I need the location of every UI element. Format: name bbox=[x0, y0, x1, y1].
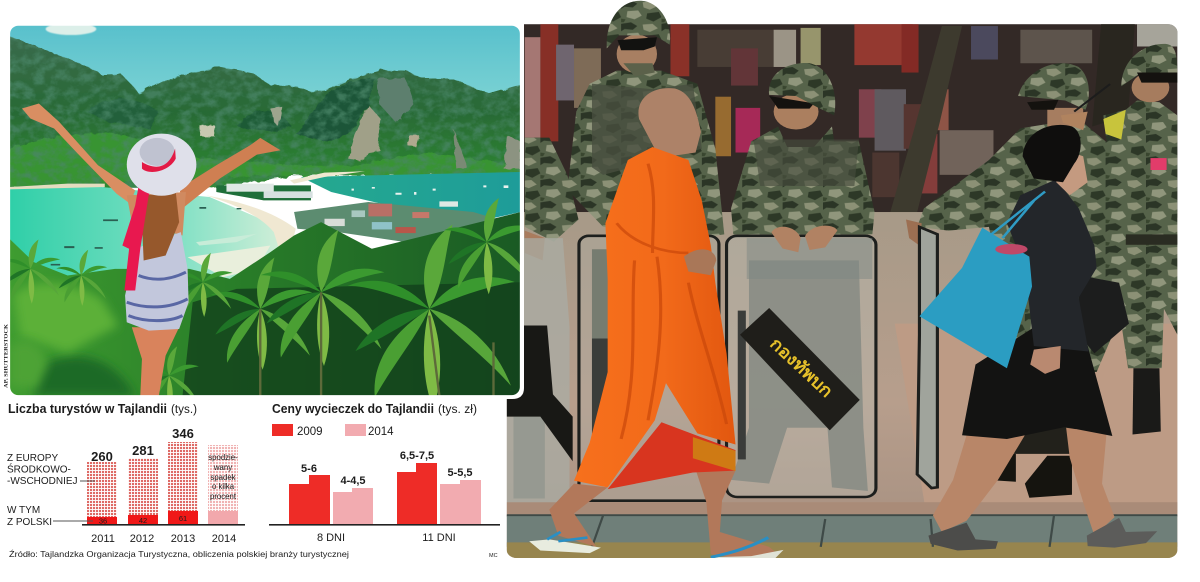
jungle foreground bbox=[9, 212, 521, 396]
source line: Źródło: Tajlandzka Organizacja Turystyczna, obliczenia polskiej branży turystycznej bbox=[9, 549, 349, 559]
woman bbox=[919, 125, 1157, 551]
back bbox=[127, 192, 186, 235]
label: from Central-Eastern Europe: -WSCHODNIEJ bbox=[7, 476, 78, 487]
bar 2012 bbox=[128, 443, 158, 545]
woman face bbox=[1056, 154, 1088, 196]
chart title: Ceny wycieczek do Tajlandii bbox=[272, 401, 434, 416]
legs bbox=[132, 327, 179, 396]
pavement bbox=[507, 212, 1177, 558]
11-day group bbox=[397, 450, 481, 544]
boats and village bbox=[51, 184, 508, 266]
scene clipped to the rounded frame bbox=[2, 23, 531, 410]
raised right arm bbox=[179, 138, 281, 207]
soldier at far right bbox=[1103, 44, 1177, 434]
soldier far left bbox=[513, 138, 579, 498]
label: including from Poland: W TYM bbox=[7, 505, 40, 516]
dark trunks and shade bbox=[10, 282, 521, 396]
bar 2012: 2012 bbox=[130, 533, 154, 545]
soldier using a radio bbox=[906, 63, 1126, 372]
left bay bbox=[9, 187, 287, 279]
sandy beaches bbox=[9, 171, 365, 277]
monk undergarment bbox=[608, 422, 736, 489]
bar 2013 bbox=[168, 426, 198, 545]
pink scarf bbox=[122, 162, 172, 291]
monk legs bbox=[550, 470, 774, 557]
right bay bbox=[301, 172, 521, 219]
yellow lettering on the shield plate: กองทัพบก bbox=[766, 334, 836, 401]
woman jacket bbox=[1007, 179, 1097, 352]
riot shield: centre bbox=[727, 236, 876, 497]
chart unit: (tys.) bbox=[171, 404, 197, 416]
woman hair bbox=[1023, 125, 1081, 182]
monk bbox=[529, 88, 784, 562]
boots of the soldier behind the woman bbox=[998, 427, 1076, 498]
8-day group: 8 DNI bbox=[317, 532, 345, 544]
label: from Central-Eastern Europe: ŚRODKOWO- bbox=[7, 462, 71, 476]
woman left sandal bbox=[928, 523, 998, 551]
mountain foliage texture bbox=[7, 32, 524, 189]
chart: trip prices to Thailand bbox=[269, 401, 500, 544]
axis bbox=[269, 524, 500, 526]
sky bbox=[10, 26, 520, 94]
market stalls background bbox=[507, 24, 1177, 218]
rear flip-flop bbox=[529, 539, 601, 553]
woman legs bbox=[933, 428, 1115, 536]
bar 2011: 36 bbox=[99, 516, 107, 526]
axis bbox=[82, 524, 245, 526]
photo credit: AP, SHUTTERSTOCK bbox=[4, 323, 10, 388]
woman hand bbox=[1030, 346, 1061, 374]
blue shopping bag bbox=[919, 228, 1032, 368]
bar 2014 with forecast note: wany bbox=[213, 463, 232, 472]
riot shield: edge-on at right bbox=[917, 227, 937, 488]
black shield plate bbox=[740, 308, 860, 430]
label: including from Poland bbox=[7, 505, 93, 528]
sun hat bbox=[127, 134, 196, 196]
11-day group: 5-5,5 bbox=[447, 467, 473, 479]
author initials: MC bbox=[489, 553, 498, 559]
photo: soldiers, monk and woman in Bangkok bbox=[507, 1, 1177, 562]
bar 2013: 346 bbox=[172, 426, 194, 441]
palm trees bbox=[2, 198, 531, 410]
label: from Central-Eastern Europe bbox=[7, 453, 95, 487]
patterned dress bbox=[125, 232, 189, 331]
label: including from Poland: Z POLSKI bbox=[7, 517, 52, 528]
front flip-flop bbox=[714, 550, 784, 558]
rounded frame outline bbox=[9, 25, 521, 396]
legend: 2014 bbox=[368, 426, 394, 438]
limestone cliffs bbox=[199, 78, 521, 169]
mountains bbox=[7, 35, 524, 189]
bar 2011: 2011 bbox=[91, 533, 115, 545]
woman skirt bbox=[962, 327, 1112, 439]
bar 2012: 42 bbox=[139, 516, 147, 525]
scene clipped to the photo frame bbox=[507, 24, 1177, 562]
orange robe bbox=[574, 147, 736, 487]
soldier helmet rising above the photo frame bbox=[607, 1, 670, 76]
bar 2014 with forecast note: 2014 bbox=[212, 533, 236, 545]
legend: 2009 bbox=[297, 426, 323, 438]
cloud bbox=[46, 23, 96, 35]
chart unit: (tys. zł) bbox=[438, 404, 477, 416]
bar 2014 with forecast note: o kilka bbox=[212, 482, 235, 491]
riot shield: left, behind the monk bbox=[579, 236, 719, 501]
woman right sandal bbox=[1087, 518, 1157, 548]
bar 2014 with forecast note: procent bbox=[210, 492, 237, 501]
bar 2014 with forecast note bbox=[208, 445, 238, 545]
bar 2011 bbox=[87, 449, 117, 545]
bar 2013: 61 bbox=[179, 514, 187, 523]
soldier behind the monk bbox=[567, 71, 724, 405]
monk hand bbox=[684, 249, 716, 275]
bar 2012: 281 bbox=[132, 443, 154, 458]
8-day group: 5-6 bbox=[301, 463, 317, 475]
long hair bbox=[142, 192, 179, 260]
legend bbox=[272, 424, 394, 438]
bar 2014 with forecast note: spadek bbox=[210, 473, 236, 482]
white frame around the beach photo bbox=[0, 20, 524, 399]
soldier at centre bbox=[731, 63, 875, 234]
bar 2014 with forecast note: spodzie- bbox=[208, 453, 238, 462]
photo: woman over a tropical bay bbox=[2, 23, 531, 410]
woman with raised arms bbox=[22, 104, 281, 396]
riot shield: far left bbox=[507, 238, 573, 502]
raised left arm bbox=[22, 104, 135, 204]
chart title: Liczba turystów w Tajlandii bbox=[8, 401, 167, 416]
hands on the shield bbox=[771, 226, 837, 252]
11-day group: 6,5-7,5 bbox=[400, 450, 434, 462]
chart: tourists in Thailand bbox=[7, 401, 245, 545]
11-day group: 11 DNI bbox=[422, 532, 456, 544]
8-day group bbox=[289, 463, 373, 544]
bar 2013: 2013 bbox=[171, 533, 195, 545]
8-day group: 4-4,5 bbox=[340, 475, 366, 487]
label: from Central-Eastern Europe: Z EUROPY bbox=[7, 453, 58, 464]
monk head bbox=[638, 88, 701, 156]
woman backpack bbox=[1079, 275, 1129, 353]
legs visible through the shields bbox=[731, 260, 868, 491]
bar 2011: 260 bbox=[91, 449, 113, 464]
